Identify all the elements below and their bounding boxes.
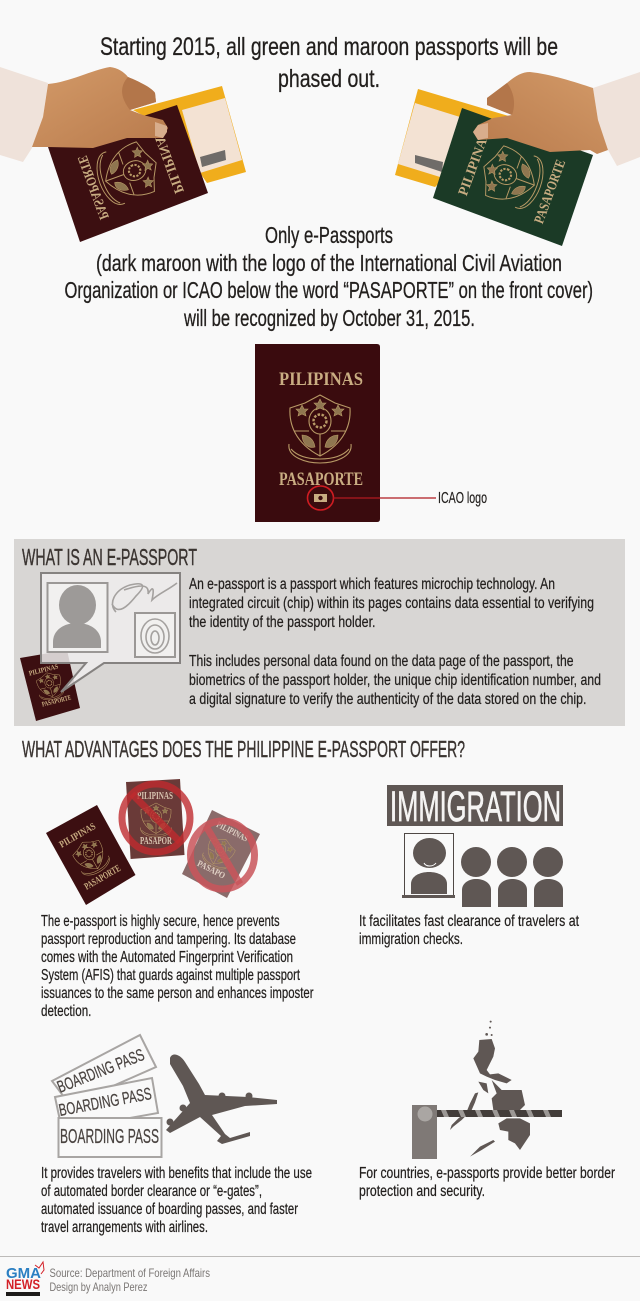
icon: valid and crossed-out passports: PASAPOR <box>140 836 173 847</box>
intro text: only e-passports: Only e-Passports <box>265 222 393 248</box>
text: travel advantage: travel arrangements with airlines. <box>41 1219 208 1236</box>
text: border advantage <box>359 1165 615 1200</box>
source credits: Source: Department of Foreign Affairs <box>50 1266 210 1280</box>
footer rule <box>0 1256 640 1257</box>
text: immigration advantage <box>359 913 580 948</box>
e-passport cover <box>255 344 380 522</box>
text: travel advantage: of automated border clearance or “e-gates”, <box>41 1183 262 1200</box>
source credits: Design by Analyn Perez <box>50 1280 148 1294</box>
photo: hand holding maroon passport: PASAPORTE <box>74 154 111 222</box>
logo: GMA News: NEWS <box>6 1276 40 1292</box>
panel: what is an e-passport <box>14 539 625 726</box>
text: security advantage: The e-passport is highly secure, hence prevents <box>41 913 280 930</box>
icon: boarding passes: BOARDING PASS <box>54 1045 147 1097</box>
icon: boarding passes <box>52 1035 162 1157</box>
text: travel advantage: It provides travelers with benefits that include the use <box>41 1165 312 1182</box>
logo: GMA News <box>6 1262 44 1296</box>
icon: immigration sign and queue <box>387 783 563 907</box>
icon: valid and crossed-out passports: PASAPORTE <box>83 863 123 893</box>
text: definition of e-passport <box>189 576 601 708</box>
text: security advantage: System (AFIS) that guards against multiple passport <box>41 967 300 984</box>
text: immigration advantage: immigration checks. <box>359 931 463 948</box>
icon: valid and crossed-out passports: PILIPINAS <box>137 791 173 802</box>
icon: boarding passes: BOARDING PASS <box>60 1126 159 1148</box>
text: security advantage: detection. <box>41 1003 91 1020</box>
icon: valid and crossed-out passports: PASAPO <box>196 858 227 881</box>
icon: speech bubble with biometrics <box>41 573 180 692</box>
text: security advantage: comes with the Automated Fingerprint Verification <box>41 949 293 966</box>
text: security advantage <box>41 913 314 1020</box>
icon: valid and crossed-out passports <box>46 779 260 905</box>
photo: hand holding maroon passport: PILIPINAS <box>149 128 186 196</box>
text: immigration advantage: It facilitates fast clearance of travelers at <box>359 913 580 930</box>
title: phased out. <box>278 65 380 93</box>
title <box>100 33 558 93</box>
intro text: only e-passports <box>64 222 593 331</box>
intro text: only e-passports: will be recognized by October 31, 2015. <box>183 305 475 331</box>
photo: hand holding green passport: PILIPINAS <box>456 130 493 198</box>
heading: what is an e-passport: WHAT IS AN E-PASSPORT <box>22 544 197 570</box>
icon: valid and crossed-out passports: PILIPINAS <box>58 821 98 851</box>
e-passport cover: PILIPINAS <box>279 369 363 390</box>
text: security advantage: passport reproduction and tampering. Its database <box>41 931 296 948</box>
logo: GMA News: GMA <box>6 1265 41 1282</box>
icon: philippine map <box>450 1021 530 1157</box>
text: border advantage: protection and security. <box>359 1183 485 1200</box>
e-passport cover: PASAPORTE <box>279 469 363 490</box>
source credits <box>50 1266 210 1294</box>
text: travel advantage <box>41 1165 312 1236</box>
icon: border barrier <box>412 1105 562 1159</box>
icon: small passport: PILIPINAS <box>28 663 59 678</box>
photo: hand holding green passport <box>395 72 640 246</box>
text: security advantage: issuances to the same person and enhances imposter <box>41 985 314 1002</box>
icon: airplane <box>166 1055 277 1144</box>
photo: hand holding maroon passport <box>0 67 246 242</box>
callout: ICAO logo <box>308 486 487 510</box>
icon: boarding passes: BOARDING PASS <box>57 1084 153 1120</box>
icon: small passport: PASAPORTE <box>41 693 72 709</box>
callout: ICAO logo: ICAO logo <box>438 490 487 507</box>
text: travel advantage: automated issuance of boarding passes, and faster <box>41 1201 298 1218</box>
icon: small passport <box>20 650 80 721</box>
icon: valid and crossed-out passports: PILIPINAS <box>215 819 250 843</box>
text: definition of e-passport: the identity of the passport holder. <box>189 614 376 631</box>
photo: hand holding green passport: PASAPORTE <box>532 158 569 226</box>
